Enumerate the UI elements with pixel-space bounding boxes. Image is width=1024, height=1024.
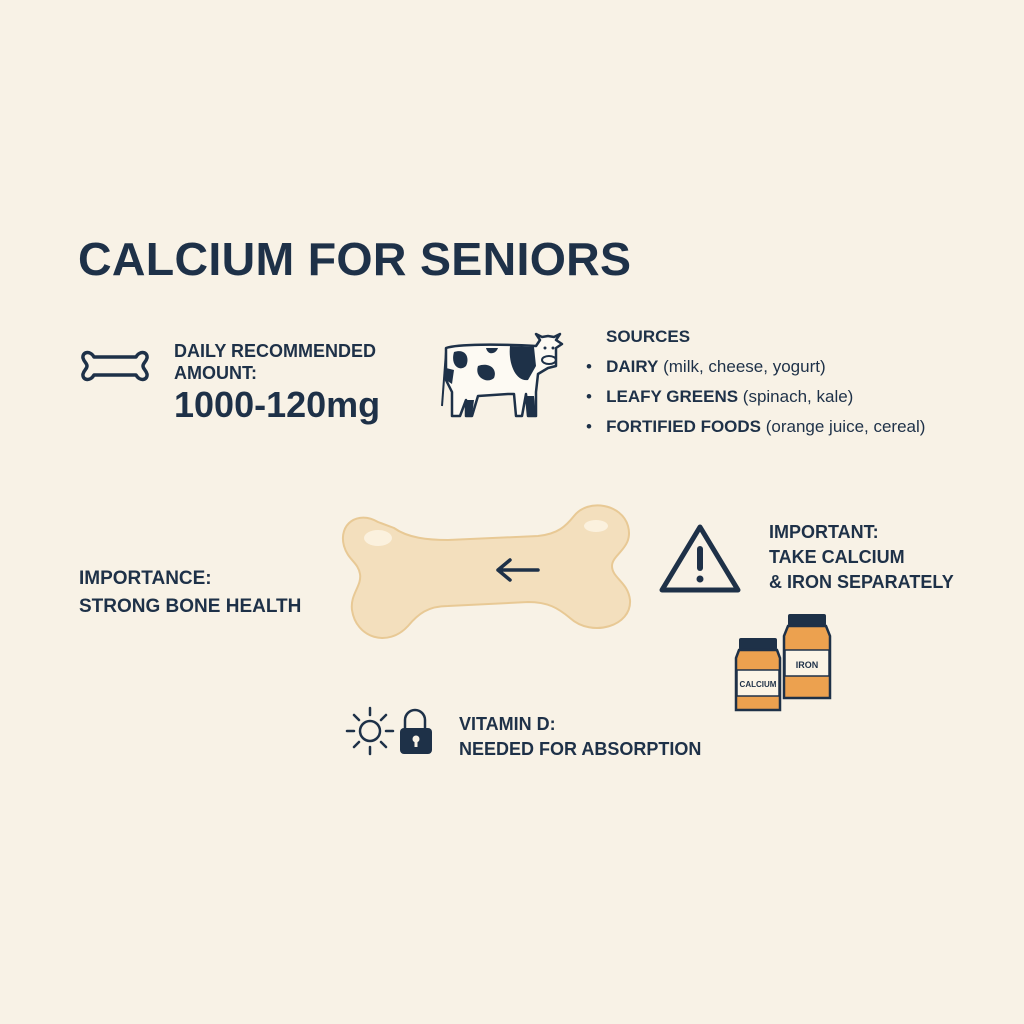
text: sources xyxy=(586,327,925,436)
text: vitamin D: NEEDED FOR ABSORPTION xyxy=(459,739,701,759)
text: importance: STRONG BONE HEALTH xyxy=(79,596,301,617)
icon: cow xyxy=(441,332,564,418)
icon: small bone xyxy=(81,350,149,382)
icon: supplement bottles xyxy=(734,614,832,712)
text: daily amount: AMOUNT: xyxy=(174,363,257,383)
text: importance xyxy=(79,568,301,617)
icon: supplement bottles: IRON xyxy=(796,660,818,670)
title: CALCIUM FOR SENIORS xyxy=(78,233,631,285)
illustration: large bone with arrow xyxy=(342,504,632,639)
text: important: TAKE CALCIUM xyxy=(769,547,905,567)
text: vitamin D: VITAMIN D: xyxy=(459,714,556,734)
text: sources: • DAIRY (milk, cheese, yogurt) xyxy=(586,357,826,376)
text: daily amount xyxy=(174,341,380,425)
text: sources: • FORTIFIED FOODS (orange juice, cereal) xyxy=(586,417,925,436)
text: daily amount: DAILY RECOMMENDED xyxy=(174,341,376,361)
text: daily amount: 1000-120mg xyxy=(174,384,380,425)
icon: supplement bottles: CALCIUM xyxy=(740,680,777,689)
text: important xyxy=(769,522,954,592)
text: sources: • LEAFY GREENS (spinach, kale) xyxy=(586,387,853,406)
text: important: & IRON SEPARATELY xyxy=(769,572,954,592)
icon: warning xyxy=(660,524,740,592)
text: sources: SOURCES xyxy=(606,327,690,346)
text: important: IMPORTANT: xyxy=(769,522,879,542)
text: importance: IMPORTANCE: xyxy=(79,568,212,589)
text: vitamin D xyxy=(459,714,701,759)
icon: sun and lock xyxy=(346,706,432,756)
